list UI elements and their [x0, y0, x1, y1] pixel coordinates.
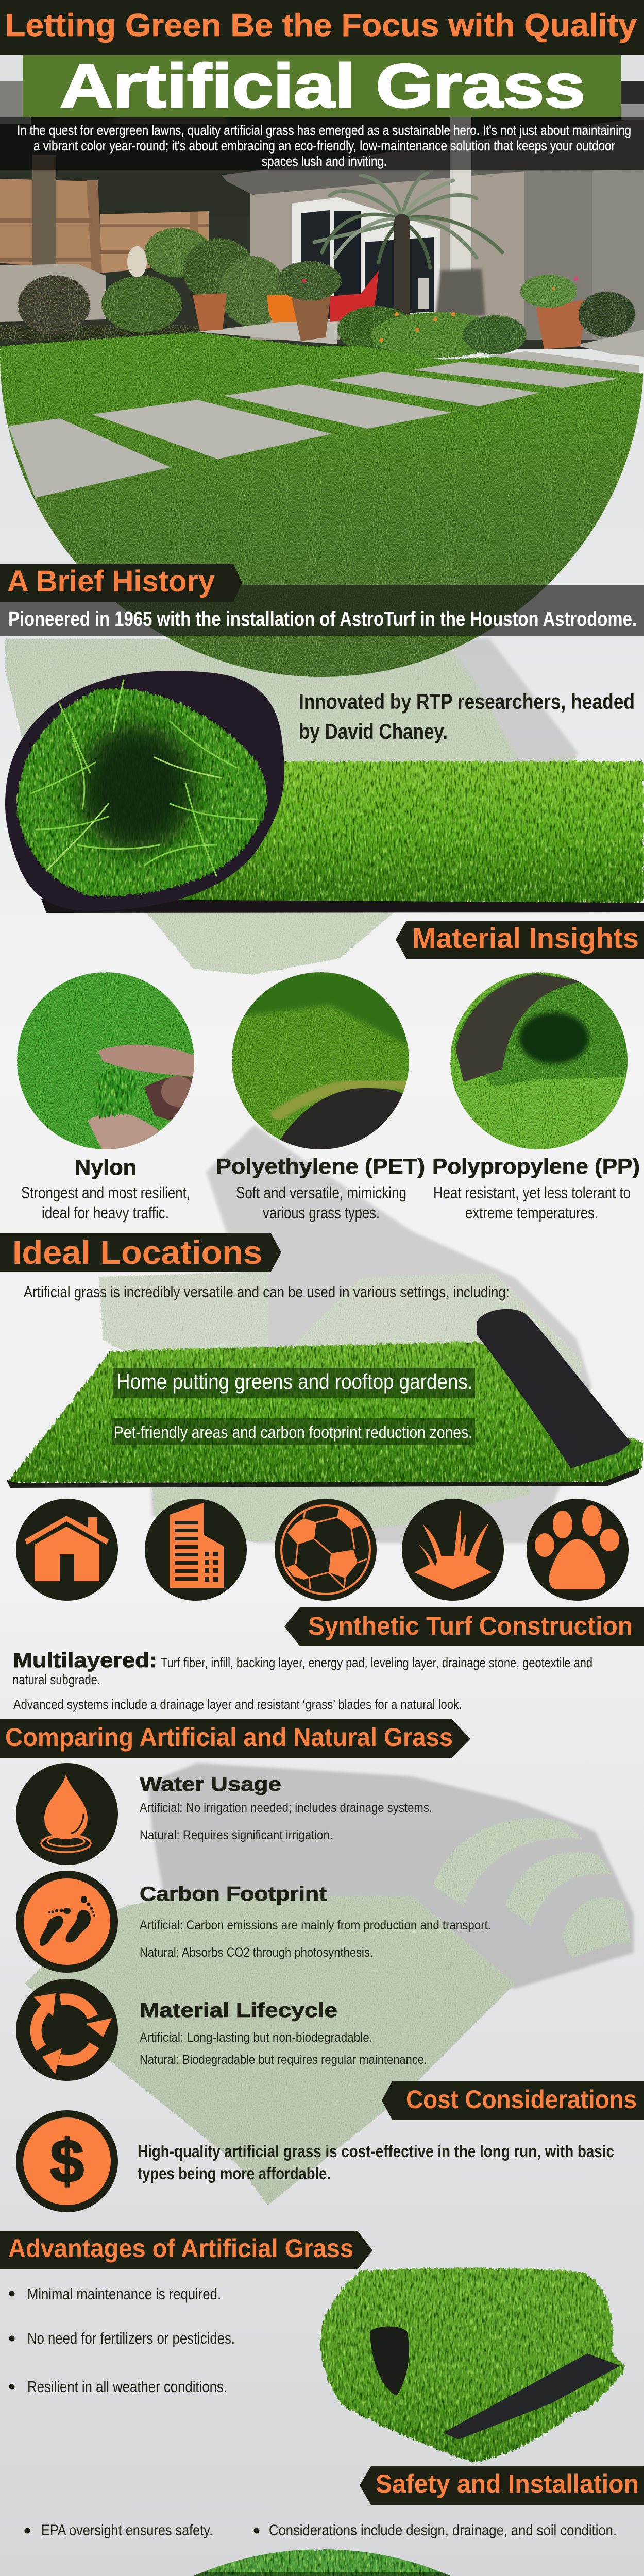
location callout one: Home putting greens and rooftop gardens. — [116, 1369, 473, 1394]
location callout two — [112, 1418, 475, 1445]
photo: hand in grass — [17, 972, 196, 1151]
title line two: Artificial Grass — [60, 52, 585, 121]
material: nylon — [17, 972, 196, 1222]
material: polyethylene — [216, 972, 425, 1222]
heading: a brief history: A Brief History — [7, 565, 215, 598]
locations intro text: Artificial grass is incredibly versatile and can be used in various settings, including: — [24, 1283, 510, 1301]
concrete stepping stones — [8, 351, 639, 498]
comparison: carbon footprint: Natural: Absorbs CO2 through photosynthesis. — [140, 1945, 373, 1960]
heading: comparing artificial and natural grass: Comparing Artificial and Natural Grass — [5, 1723, 453, 1752]
terracotta pots — [193, 293, 587, 349]
lawn — [0, 332, 644, 680]
intro paragraph on dark band: spaces lush and inviting. — [262, 154, 387, 169]
comparison: water usage: Natural: Requires significant irrigation. — [140, 1828, 333, 1842]
hero photo of a backyard with artificial lawn — [0, 81, 644, 680]
unrolled backing strip — [443, 2353, 620, 2439]
heading: safety and installation: Safety and Installation — [376, 2469, 639, 2498]
title line one: Letting Green Be the Focus with Quality — [5, 8, 637, 43]
material: polypropylene: extreme temperatures. — [465, 1204, 598, 1222]
heading: advantages of artificial grass: Advantages of Artificial Grass — [8, 2234, 353, 2263]
patio chairs — [267, 270, 379, 326]
flat turf — [93, 761, 644, 903]
material: polypropylene — [432, 972, 640, 1222]
patio door — [292, 197, 440, 322]
faded grass roll backdrop two — [99, 1125, 591, 1543]
comparison: water usage — [16, 1763, 432, 1865]
advantages list: Minimal maintenance is required. — [27, 2285, 221, 2303]
material: polyethylene: Soft and versatile, mimicking — [236, 1183, 406, 1202]
icon: building — [145, 1499, 247, 1601]
construction details: Multilayered: — [13, 1649, 157, 1672]
heading: synthetic turf construction — [284, 1607, 644, 1646]
turf backing edge — [41, 899, 644, 913]
trees behind the house — [0, 81, 644, 349]
roll inner backing — [370, 2327, 409, 2396]
advantages list: Resilient in all weather conditions. — [27, 2378, 227, 2396]
comparison: water usage: Water Usage — [140, 1773, 281, 1795]
flowering plants — [277, 261, 635, 358]
comparison: carbon footprint: Artificial: Carbon emissions are mainly from production and transport. — [140, 1918, 491, 1933]
rolled turf illustration — [320, 2268, 626, 2462]
icon: footprints — [16, 1871, 118, 1973]
comparison: carbon footprint — [16, 1871, 491, 1973]
wooden fence — [0, 155, 209, 276]
photo: rolled turf on lawn — [450, 972, 629, 1150]
photo: turf edge curl — [232, 972, 409, 1150]
material: nylon: Strongest and most resilient, — [21, 1183, 190, 1202]
unrolled turf mat illustration — [6, 1309, 644, 1488]
icon: dollar sign: $ — [50, 2127, 84, 2195]
material: polyethylene: Polyethylene (PET) — [216, 1154, 425, 1178]
safety list — [25, 2522, 617, 2539]
construction details: Advanced systems include a drainage layer and resistant ‘grass’ blades for a natural look. — [13, 1697, 462, 1712]
comparison: material lifecycle: Material Lifecycle — [140, 1999, 337, 2022]
cost block — [16, 2110, 614, 2212]
icon: water drop — [16, 1763, 118, 1865]
icon: grass tuft — [402, 1499, 504, 1601]
stucco house walls — [222, 81, 644, 340]
large turf roll illustration — [5, 671, 644, 913]
comparison: carbon footprint: Carbon Footprint — [140, 1883, 327, 1905]
low garden wall and shrubs — [0, 228, 286, 341]
flower dots — [302, 277, 578, 342]
heading: ideal locations: Ideal Locations — [12, 1234, 262, 1271]
comparison: water usage: Artificial: No irrigation needed; includes drainage systems. — [140, 1801, 432, 1815]
stone pillar — [435, 269, 485, 317]
material: nylon: ideal for heavy traffic. — [42, 1204, 169, 1222]
history note: by David Chaney. — [299, 719, 448, 743]
dome photo — [0, 2549, 644, 2576]
roll backing — [477, 1309, 631, 1468]
icon: paw print — [527, 1499, 629, 1601]
material: nylon: Nylon — [75, 1155, 137, 1179]
cost block: types being more affordable. — [138, 2164, 331, 2183]
icon: house — [16, 1499, 118, 1601]
roll inner grass — [16, 688, 267, 896]
turf mat — [7, 1342, 644, 1483]
heading: cost considerations — [382, 2081, 644, 2120]
safety list: EPA oversight ensures safety. — [41, 2522, 213, 2539]
comparison: material lifecycle — [16, 1979, 427, 2081]
comparison: material lifecycle: Artificial: Long-lasting but non-biodegradable. — [140, 2030, 372, 2045]
material: polypropylene: Polypropylene (PP) — [432, 1154, 640, 1178]
history note — [299, 689, 635, 743]
icon: recycling arrows — [16, 1979, 118, 2081]
construction details — [12, 1649, 592, 1712]
heading: synthetic turf construction: Synthetic Turf Construction — [308, 1612, 633, 1640]
closing panel: turf installers dome — [0, 2549, 644, 2576]
roll end grass — [576, 1442, 640, 1472]
green title banner — [23, 52, 621, 121]
faded grass roll backdrop three — [25, 1763, 634, 2205]
construction details: natural subgrade. — [12, 1672, 100, 1687]
advantages list: No need for fertilizers or pesticides. — [27, 2329, 235, 2347]
roll blades — [31, 680, 258, 876]
intro paragraph on dark band — [0, 117, 644, 170]
material: polyethylene: various grass types. — [263, 1204, 380, 1222]
palm tree — [314, 173, 502, 314]
top title bar — [0, 0, 644, 55]
location callout two: Pet-friendly areas and carbon footprint reduction zones. — [114, 1423, 472, 1442]
icon: dollar sign — [16, 2110, 118, 2212]
icon: soccer ball — [275, 1499, 377, 1601]
heading: material insights: Material Insights — [412, 922, 639, 954]
history text band — [0, 585, 644, 636]
advantages list — [9, 2285, 235, 2396]
concrete patio — [197, 322, 644, 357]
faded grass roll backdrop one — [5, 639, 580, 975]
mat backing edge — [6, 1468, 639, 1488]
roll backing — [5, 671, 284, 911]
comparison: material lifecycle: Natural: Biodegradable but requires regular maintenance. — [140, 2053, 427, 2067]
roll centre — [77, 724, 196, 853]
